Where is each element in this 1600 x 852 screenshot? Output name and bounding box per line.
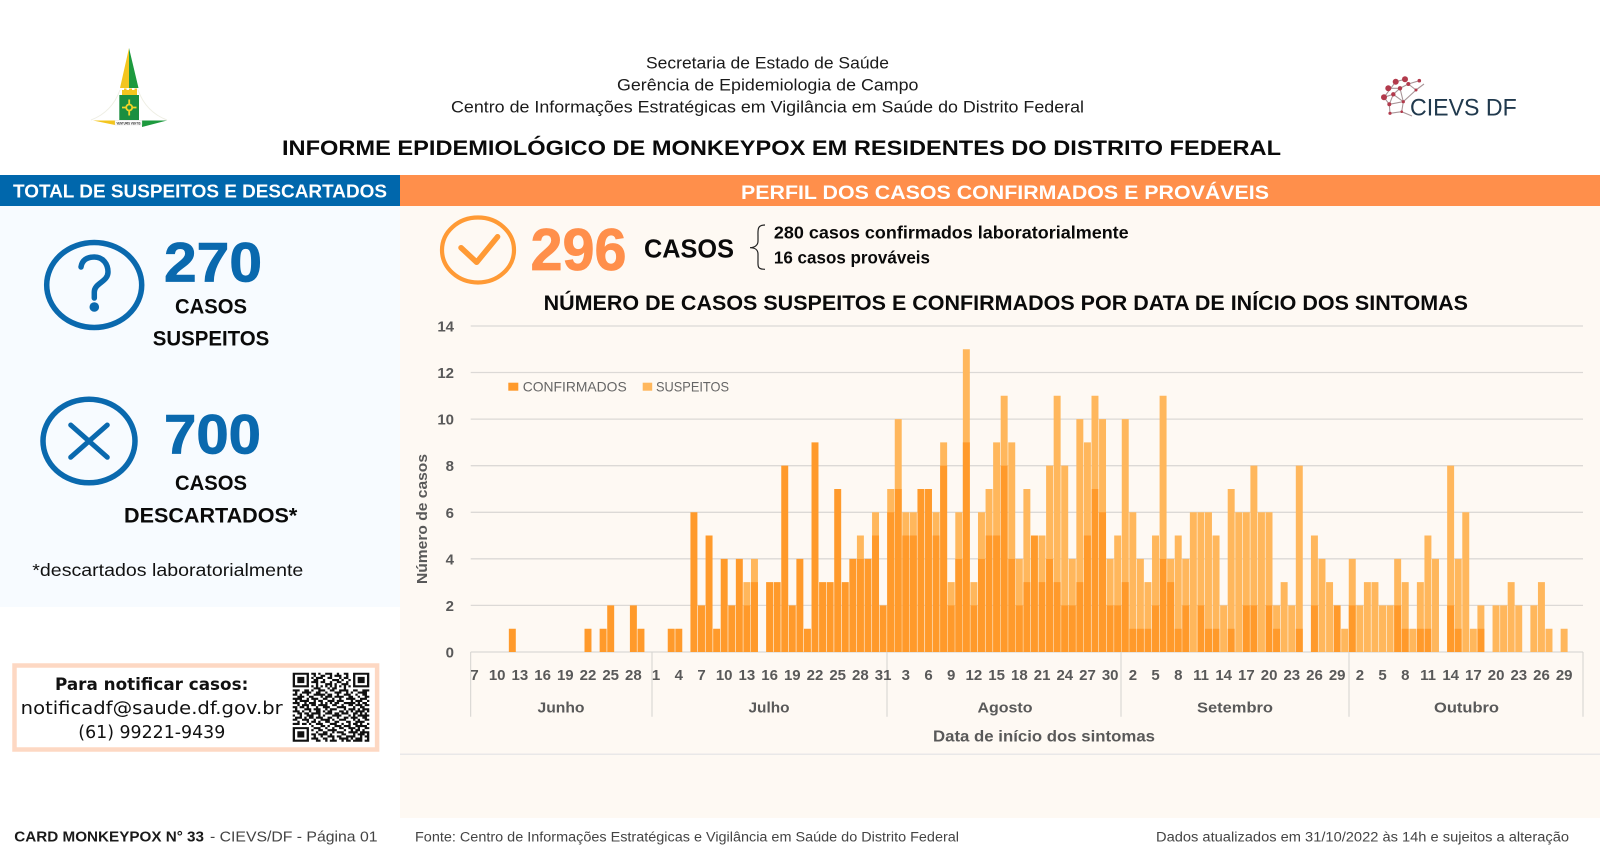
stat: 296 casos: CASOS (644, 235, 734, 263)
x axis day labels: 2 (1129, 667, 1137, 684)
case breakdown: 280 casos confirmados laboratorialmente (774, 222, 1129, 242)
x axis day labels: 23 (1510, 667, 1527, 684)
stat: 270 casos suspeitos: 270 (164, 231, 262, 294)
footer: card number: - CIEVS/DF - Página 01 (210, 830, 378, 846)
x axis day labels: 20 (1488, 667, 1504, 684)
y axis numbers: 10 (437, 412, 454, 429)
legend: CONFIRMADOS (523, 379, 627, 395)
header: institution lines: Gerência de Epidemiologia de Campo (617, 76, 918, 95)
header: institution lines: Secretaria de Estado de Saúde (646, 53, 889, 72)
x axis day labels: 8 (1401, 667, 1409, 684)
x axis day labels: 3 (902, 667, 910, 684)
logo: Distrito Federal coat of arms (91, 48, 167, 127)
bars: confirmados (512, 442, 1481, 652)
x axis day labels: 23 (1283, 667, 1300, 684)
legend (508, 379, 729, 395)
icon: QR code (293, 673, 369, 742)
x axis day labels: 25 (602, 667, 619, 684)
x axis day labels: 28 (852, 667, 869, 684)
x axis day labels: 25 (829, 667, 846, 684)
panel: perfil dos casos (400, 175, 1600, 818)
y axis numbers: 4 (446, 551, 455, 568)
notification text (21, 675, 284, 743)
y axis numbers: 0 (446, 644, 454, 662)
x axis day labels: 16 (534, 667, 551, 684)
x axis day labels: 12 (966, 667, 982, 684)
stat: 270 casos suspeitos: CASOS (175, 295, 247, 318)
notification text: (61) 99221-9439 (78, 723, 225, 743)
icon: cross (43, 399, 135, 483)
x axis day labels: 22 (807, 667, 823, 684)
stat: 296 casos (530, 217, 734, 283)
logo: CIEVS DF: CIEVS DF (1410, 94, 1517, 122)
x axis month labels: Junho (538, 700, 584, 717)
x axis month labels: Julho (748, 700, 790, 717)
x axis day labels: 18 (1011, 667, 1028, 684)
x axis day labels: 28 (625, 667, 642, 684)
stat: 700 casos descartados: 700 (164, 402, 261, 465)
panel heading: suspeitos e descartados: TOTAL DE SUSPEITOS E DESCARTADOS (13, 181, 387, 202)
panel heading: suspeitos e descartados (0, 175, 400, 206)
chart title: NÚMERO DE CASOS SUSPEITOS E CONFIRMADOS POR DATA DE INÍCIO DOS SINTOMAS (544, 291, 1468, 315)
x axis day labels: 5 (1378, 667, 1387, 684)
x axis day labels: 21 (1034, 667, 1050, 684)
x axis day labels (470, 667, 1573, 684)
x axis day labels: 10 (489, 667, 506, 684)
y axis numbers: 6 (446, 505, 454, 522)
panel: total de suspeitos e descartados (0, 175, 400, 607)
x axis day labels: 7 (697, 667, 706, 684)
logo: Distrito Federal coat of arms: VENTURIS VENTIS (116, 120, 141, 125)
legend: SUSPEITOS (656, 379, 729, 395)
bars: suspeitos (747, 349, 1564, 652)
x axis day labels: 30 (1102, 667, 1119, 684)
x axis day labels: 19 (784, 667, 801, 684)
notification text: Para notificar casos: (55, 675, 248, 695)
x axis day labels: 29 (1329, 667, 1346, 684)
x axis day labels: 11 (1420, 667, 1436, 684)
x axis day labels: 17 (1465, 667, 1482, 684)
x axis day labels: 17 (1238, 667, 1255, 684)
icon: question mark (47, 242, 142, 328)
stat: 270 casos suspeitos: SUSPEITOS (153, 328, 269, 351)
x axis day labels: 27 (1079, 667, 1096, 684)
x axis day labels: 13 (512, 667, 528, 684)
panel heading: perfil: PERFIL DOS CASOS CONFIRMADOS E PROVÁVEIS (741, 182, 1269, 204)
notification text: notificadf@saude.df.gov.br (21, 699, 284, 719)
x axis day labels: 4 (675, 667, 684, 684)
x axis day labels: 2 (1356, 667, 1364, 684)
x axis month labels (538, 700, 1499, 717)
x axis day labels: 24 (1056, 667, 1074, 684)
x axis day labels: 26 (1306, 667, 1323, 684)
footer: update note: Dados atualizados em 31/10/2022 às 14h e sujeitos a alteração (1156, 830, 1569, 845)
y axis numbers (437, 318, 455, 662)
x axis day labels: 15 (988, 667, 1005, 684)
x axis day labels: 16 (761, 667, 778, 684)
x axis day labels: 14 (1442, 667, 1460, 684)
x axis day labels: 19 (557, 667, 574, 684)
x axis month labels: Agosto (978, 700, 1032, 717)
header: institution lines: Centro de Informações Estratégicas em Vigilância em Saúde do Distrito Federal (451, 98, 1084, 117)
x axis day labels: 11 (1193, 667, 1209, 684)
y axis title: Número de casos (414, 454, 431, 584)
x axis day labels: 8 (1174, 667, 1182, 684)
x axis day labels: 7 (470, 667, 479, 684)
y axis numbers: 14 (437, 318, 455, 336)
x axis title: Data de início dos sintomas (933, 729, 1155, 746)
x axis day labels: 20 (1261, 667, 1277, 684)
footer: source: Fonte: Centro de Informações Estratégicas e Vigilância em Saúde do Distrito Federal (415, 830, 959, 845)
case breakdown: 16 casos prováveis (774, 247, 930, 267)
header: institution lines (451, 53, 1084, 117)
x axis day labels: 29 (1556, 667, 1573, 684)
x axis day labels: 14 (1215, 667, 1233, 684)
logo: CIEVS DF (1381, 76, 1517, 122)
brace (750, 225, 765, 269)
icon: check mark (442, 218, 514, 282)
y axis numbers: 12 (437, 365, 454, 382)
x axis day labels: 22 (580, 667, 596, 684)
x axis day labels: 6 (924, 667, 933, 684)
y axis numbers: 8 (446, 458, 454, 475)
panel heading: perfil (400, 175, 1600, 206)
x axis day labels: 31 (875, 667, 891, 684)
x axis month labels: Outubro (1434, 700, 1499, 717)
stat: 700 casos descartados: DESCARTADOS* (124, 505, 298, 528)
footnote: descartados laboratorialmente: *descartados laboratorialmente (32, 560, 303, 580)
x axis day labels: 1 (652, 667, 660, 684)
x axis day labels: 5 (1151, 667, 1160, 684)
y axis numbers: 2 (446, 598, 454, 615)
footer: card number: CARD MONKEYPOX N° 33 (14, 830, 204, 846)
x axis day labels: 9 (947, 667, 955, 684)
x axis day labels: 26 (1533, 667, 1550, 684)
title: INFORME EPIDEMIOLÓGICO DE MONKEYPOX EM RESIDENTES DO DISTRITO FEDERAL (282, 136, 1281, 160)
x axis separators (471, 652, 1583, 717)
stat: 700 casos descartados (124, 402, 298, 528)
panel: notification box (14, 666, 377, 750)
x axis day labels: 13 (739, 667, 755, 684)
x axis month labels: Setembro (1197, 700, 1273, 717)
bar chart (414, 318, 1583, 746)
stat: 296 casos: 296 (530, 217, 626, 283)
footer: card number (14, 830, 378, 846)
x axis day labels: 10 (716, 667, 733, 684)
stat: 270 casos suspeitos (153, 231, 269, 351)
stat: 700 casos descartados: CASOS (175, 472, 247, 495)
case breakdown (774, 222, 1129, 267)
